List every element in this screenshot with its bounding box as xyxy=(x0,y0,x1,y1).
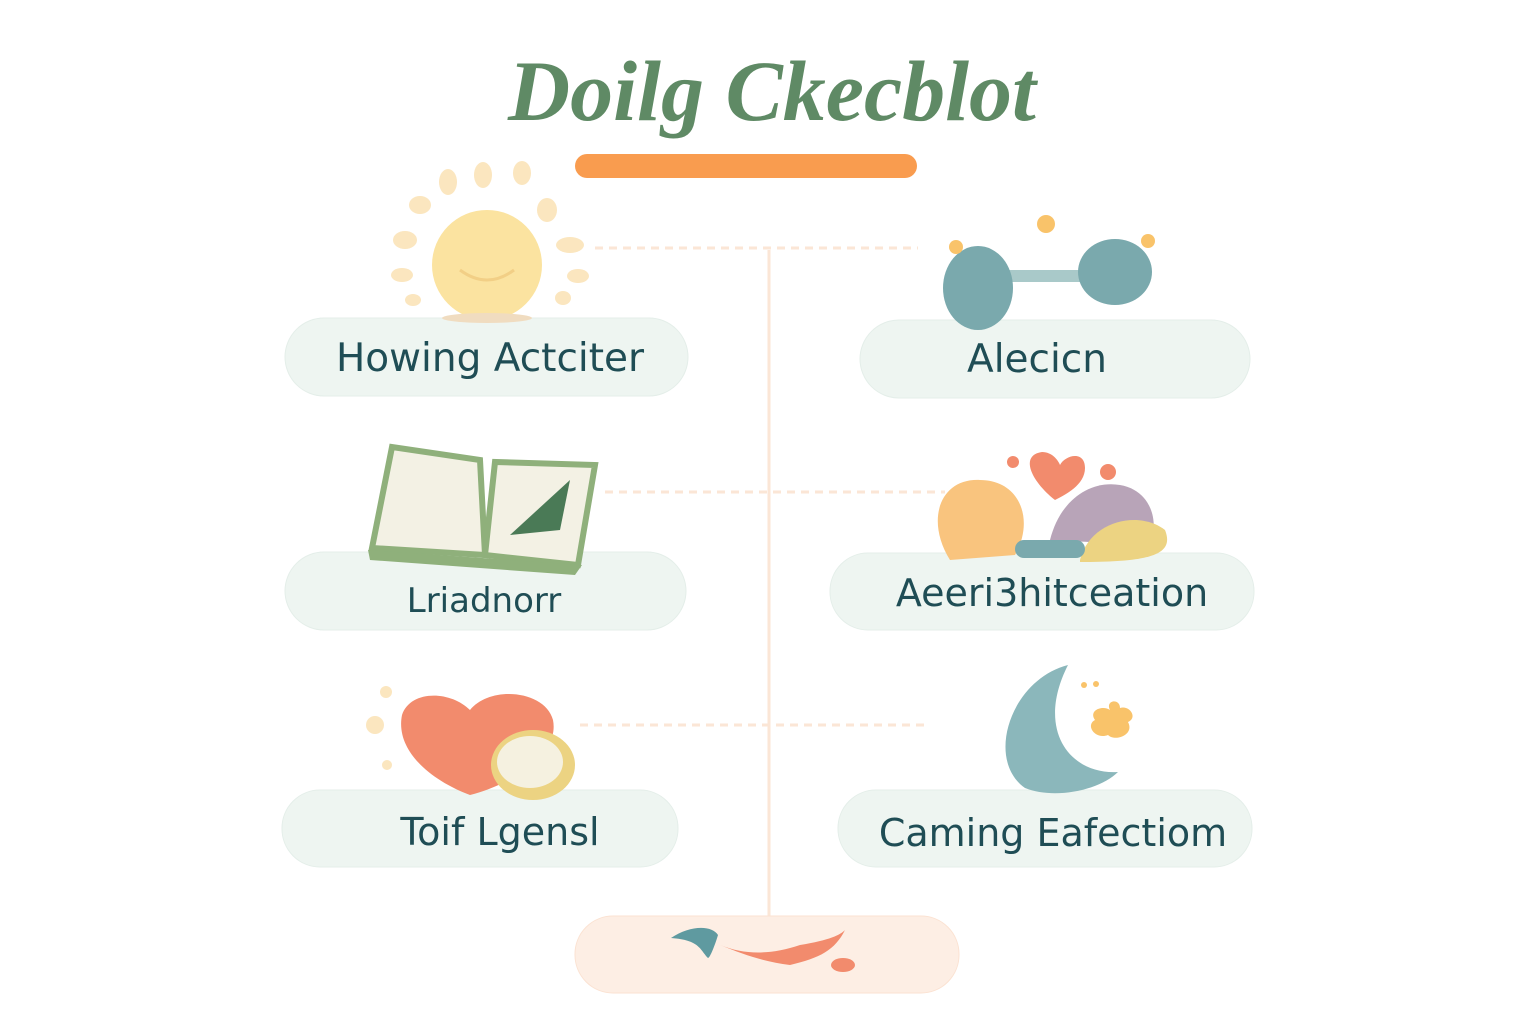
pill: Alecicn: Alecicn xyxy=(967,337,1107,382)
icon: heart with bun xyxy=(366,686,575,800)
icon: fish and leaf xyxy=(671,928,855,972)
pill: Howing Actciter xyxy=(285,318,688,396)
pill: Toif Lgensl xyxy=(282,790,678,867)
bottom pill with fish icon xyxy=(575,916,959,993)
pill: Aeeri3hitceation: Aeeri3hitceation xyxy=(896,571,1208,615)
pill: Howing Actciter: Howing Actciter xyxy=(336,336,645,381)
icon: moon xyxy=(1005,665,1133,793)
pill: Aeeri3hitceation xyxy=(830,553,1254,630)
icon: hearts cluster xyxy=(938,452,1167,562)
title: Doilg Ckecblot xyxy=(507,43,1039,139)
pill: Caming Eafectiom xyxy=(838,790,1252,867)
icon: sun xyxy=(391,161,589,323)
pill: Toif Lgensl: Toif Lgensl xyxy=(399,810,600,854)
icon: book xyxy=(368,447,595,575)
title underline xyxy=(575,154,917,178)
pill: Lriadnorr: Lriadnorr xyxy=(407,581,561,621)
pill: Alecicn xyxy=(860,320,1250,398)
pill: Caming Eafectiom: Caming Eafectiom xyxy=(879,811,1227,855)
pill: Lriadnorr xyxy=(285,552,686,630)
icon: dumbbell xyxy=(943,215,1155,330)
